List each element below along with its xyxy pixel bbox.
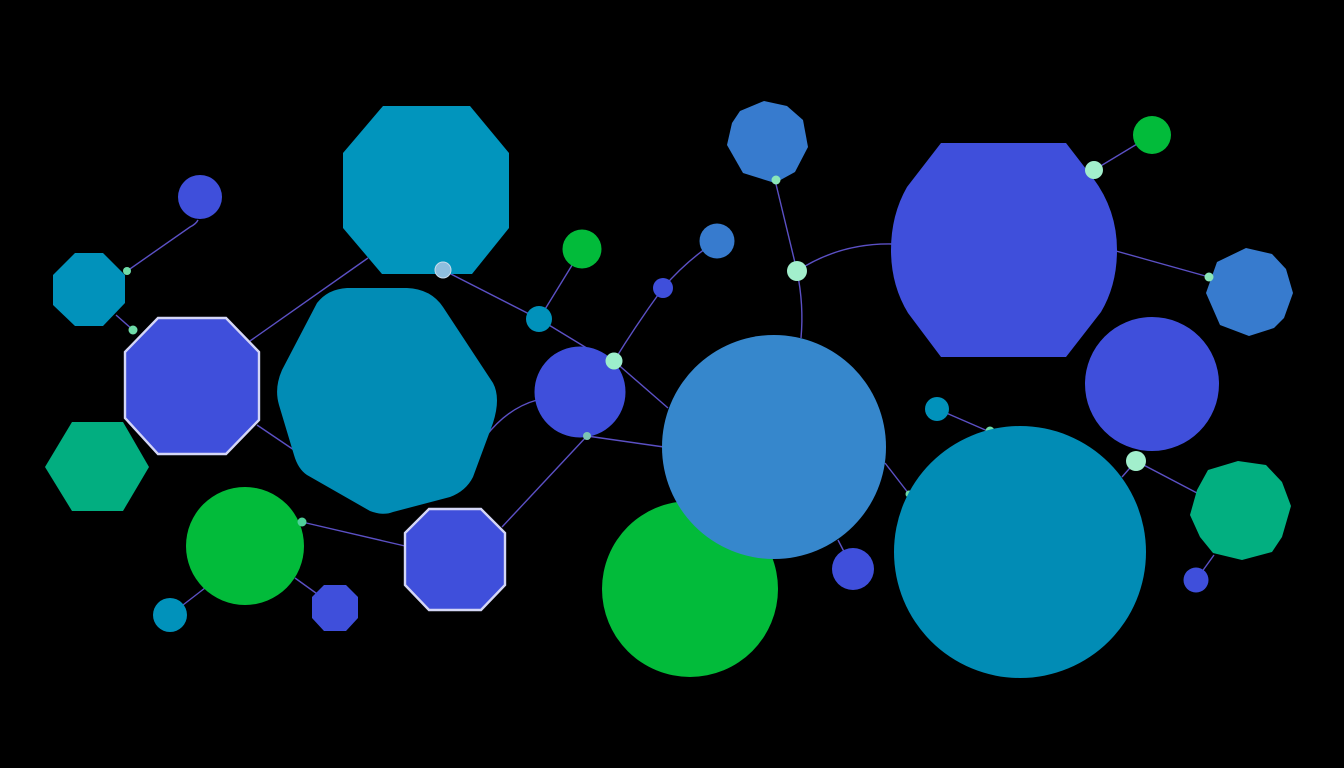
node: small teal circle: [153, 598, 187, 632]
node: small blue circle lower right: [1184, 568, 1208, 592]
node: central blue outlined octagon: [405, 509, 505, 610]
node: large sky-blue circle: [662, 335, 886, 559]
node: right green-teal polygon: [1190, 461, 1291, 560]
node: right sky-blue polygon: [1206, 248, 1293, 336]
node: small left teal octagon: [53, 253, 125, 326]
node: small sky-blue circle: [700, 224, 734, 258]
node: upper teal octagon: [343, 106, 509, 274]
node: largest teal circle: [894, 426, 1146, 678]
connector lines: [116, 135, 1214, 615]
node: top sky-blue polygon: [727, 101, 808, 183]
node: top-left blue circle: [178, 175, 222, 219]
node: green circle lower left: [186, 487, 304, 605]
node: large green circle: [602, 501, 778, 677]
node: small blue circle under hub: [832, 548, 874, 590]
node: green-teal hexagon: [45, 422, 149, 511]
junction dots: [123, 161, 1214, 526]
hidden junction dots behind large circle: [906, 426, 994, 498]
node: right blue circle: [1085, 317, 1219, 451]
node: small green circle: [562, 230, 602, 268]
node: small teal relay: [526, 306, 552, 332]
node: tiny blue circle: [653, 278, 673, 298]
node: large teal rounded hexagon: [277, 288, 497, 514]
node: large blue rounded octagon: [891, 143, 1117, 357]
node: small teal circle right: [925, 397, 949, 421]
node: medium blue circle: [534, 346, 626, 438]
node: top-right green circle: [1133, 116, 1171, 154]
node: small blue octagon: [312, 585, 358, 631]
node: left blue outlined octagon: [125, 318, 259, 454]
